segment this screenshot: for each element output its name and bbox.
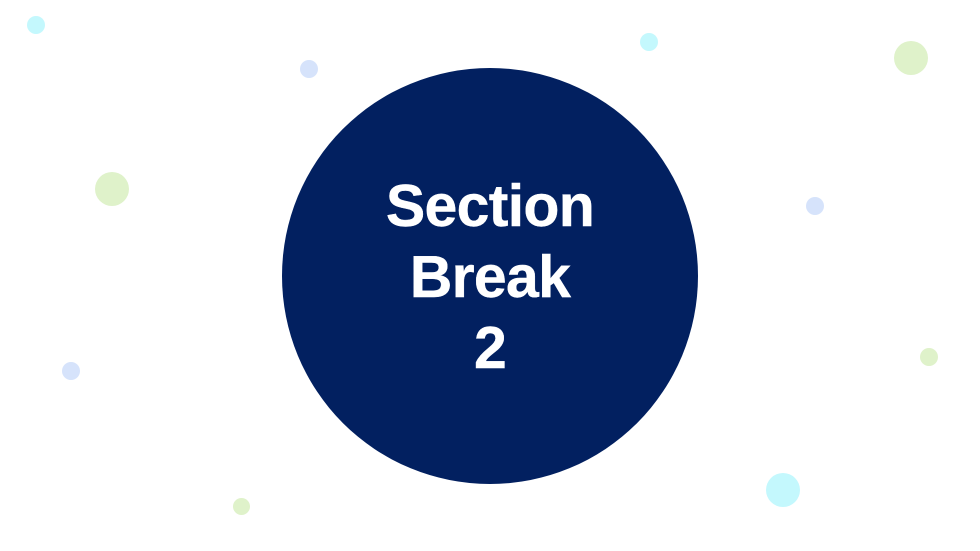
title: section break 2	[386, 173, 594, 381]
dot: periwinkle right	[806, 197, 824, 215]
title: section break 2: Section	[386, 173, 594, 239]
dot: green bottom	[233, 498, 250, 515]
dot: periwinkle top	[300, 60, 318, 78]
title: section break 2: 2	[474, 315, 506, 381]
dot: cyan bottom right	[766, 473, 800, 507]
dot: green left	[95, 172, 129, 206]
dot: cyan top left	[27, 16, 45, 34]
dot: periwinkle lower left	[62, 362, 80, 380]
title: section break 2: Break	[410, 244, 570, 310]
dot: green top right	[894, 41, 928, 75]
panel: navy circle with title	[282, 68, 698, 484]
dot: cyan top right	[640, 33, 658, 51]
dot: green lower right	[920, 348, 938, 366]
